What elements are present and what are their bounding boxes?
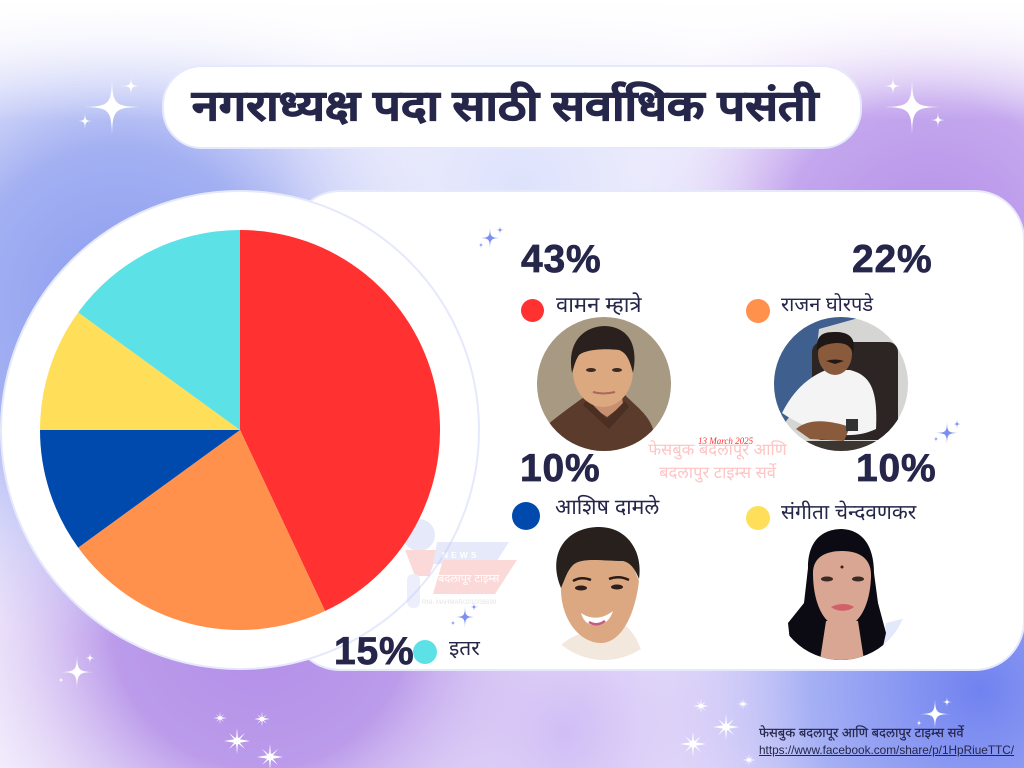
title banner bbox=[162, 65, 862, 149]
slice: संगीता चेन्दवणकर 10% bbox=[40, 312, 240, 430]
portrait: संगीता चेन्दवणकर bbox=[788, 529, 902, 660]
percent: 10 right: 10% bbox=[856, 447, 936, 490]
name: संगीता चेन्दवणकर: संगीता चेन्दवणकर bbox=[781, 501, 916, 524]
percent: 15: 15% bbox=[334, 630, 414, 673]
percent: 10 left: 10% bbox=[520, 447, 600, 490]
watermark text bbox=[648, 440, 787, 482]
watermark: news logo bbox=[405, 519, 517, 608]
title: नगराध्यक्ष पदा साठी सर्वाधिक पसंती bbox=[192, 82, 818, 129]
portrait: आशिष दामले bbox=[556, 527, 641, 660]
percent: 22: 22% bbox=[852, 238, 932, 281]
portrait: वामन म्हात्रे bbox=[537, 317, 671, 451]
slice: राजन घोरपडे 22% bbox=[78, 430, 325, 630]
legend dot: cyan bbox=[413, 640, 437, 664]
watermark text: बदलापुर टाइम्स सर्वे bbox=[659, 464, 776, 482]
legend dot: blue bbox=[512, 502, 540, 530]
panel: results card bbox=[290, 190, 1024, 671]
source link: https://www.facebook.com/share/p/1HpRiueTTC/ bbox=[759, 743, 1014, 757]
watermark text: फेसबुक बदलापूर आणि bbox=[648, 441, 787, 459]
slice: वामन म्हात्रे 43% bbox=[240, 230, 440, 611]
watermark: news logo: NEWS bbox=[442, 550, 480, 560]
slice: आशिष दामले 10% bbox=[40, 430, 240, 548]
watermark date: 13 March 2025 bbox=[698, 436, 753, 446]
panel: pie chart disc bbox=[0, 190, 480, 670]
legend dot: orange bbox=[746, 299, 770, 323]
pie chart bbox=[40, 230, 440, 630]
name: वामन म्हात्रे: वामन म्हात्रे bbox=[556, 292, 642, 317]
watermark: news logo: RNI- MAHMAR/2010/36699 bbox=[422, 600, 497, 606]
name: आशिष दामले: आशिष दामले bbox=[555, 495, 659, 519]
slice: इतर 15% bbox=[78, 230, 240, 430]
legend dot: yellow bbox=[746, 506, 770, 530]
watermark: survey text bbox=[648, 436, 787, 482]
portrait: राजन घोरपडे bbox=[774, 317, 908, 451]
watermark: news logo: बदलापूर टाइम्स bbox=[438, 573, 500, 586]
percent: 43: 43% bbox=[521, 238, 601, 281]
legend dot: red bbox=[521, 299, 544, 322]
source text: फेसबुक बदलापूर आणि बदलापुर टाइम्स सर्वे bbox=[759, 725, 964, 740]
name: राजन घोरपडे: राजन घोरपडे bbox=[781, 294, 873, 316]
name: इतर: इतर bbox=[449, 637, 480, 660]
